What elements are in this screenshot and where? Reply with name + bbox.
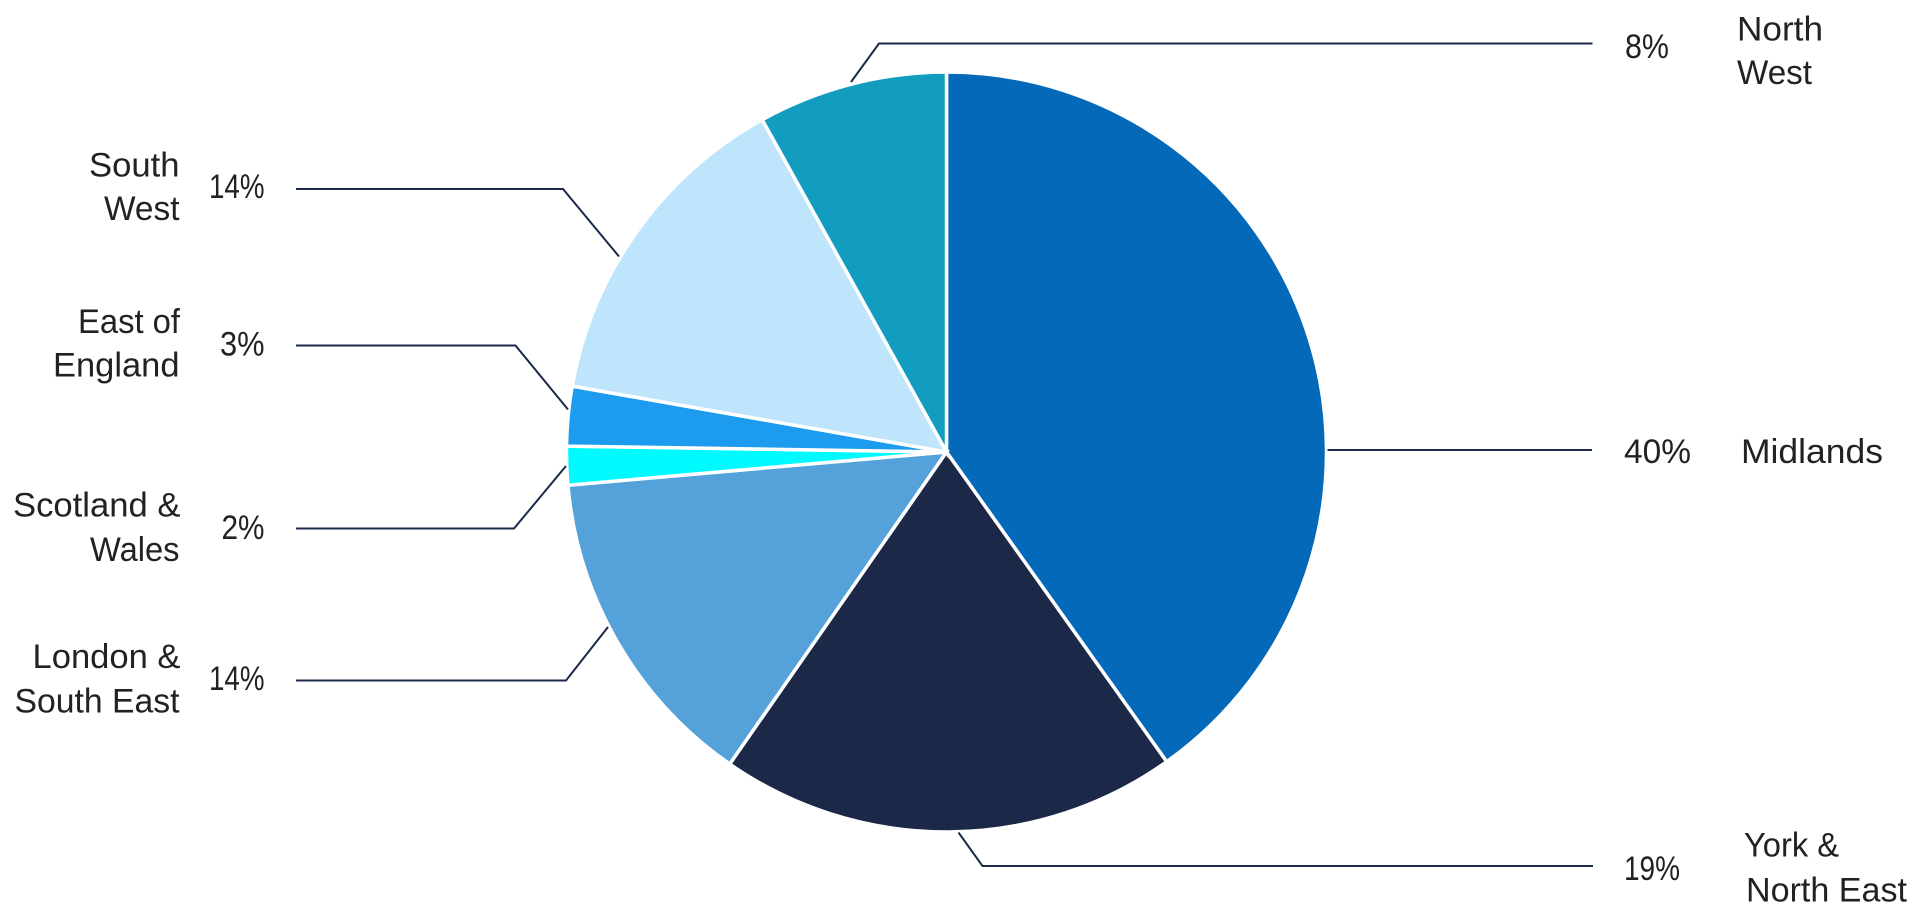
label: South West: West [104,190,180,228]
slice: North West 8% [762,72,946,452]
label: Scotland & Wales: 2% [222,509,264,547]
label: East of England: East of [78,303,181,341]
leader line: East of England [296,346,568,410]
label: York & North East [1624,826,1908,910]
label: York & North East: 19% [1624,850,1680,888]
leader line: South West [296,189,619,256]
label: London & South East [14,638,264,720]
label: York & North East: York & [1744,826,1839,864]
leader line: Midlands [1328,449,1592,451]
label: South West: South [89,146,180,184]
label: London & South East: 14% [209,660,264,698]
label: Midlands: 40% [1624,433,1691,471]
label: East of England: England [53,346,180,384]
slice: York & North East 19% [730,452,1167,832]
leader line: York & North East [958,832,1593,866]
label: North West [1625,10,1823,92]
label: South West: 14% [209,168,264,206]
slice: East of England 3% [566,386,946,452]
label: South West [89,146,264,228]
slice: London & South East 14% [568,452,946,764]
label: East of England: 3% [220,326,264,364]
leader line: Scotland & Wales [296,466,566,528]
label: East of England [53,303,264,384]
label: Midlands [1624,433,1883,471]
label: North West: West [1737,54,1813,92]
label: North West: North [1737,10,1823,48]
pie chart [566,72,1327,832]
slice: Midlands 40% [946,72,1327,762]
label: London & South East: London & [32,638,181,676]
label: Scotland & Wales [13,486,264,569]
label: York & North East: North East [1746,872,1908,910]
slice: Scotland & Wales 2% [566,446,946,485]
label: Scotland & Wales: Wales [90,531,180,569]
slice: South West 14% [572,120,946,452]
leader line: North West [851,44,1592,82]
label: North West: 8% [1625,28,1669,66]
label: London & South East: South East [14,682,180,720]
label: Scotland & Wales: Scotland & [13,486,181,524]
leader line: London & South East [296,627,608,680]
label: Midlands: Midlands [1741,433,1883,471]
